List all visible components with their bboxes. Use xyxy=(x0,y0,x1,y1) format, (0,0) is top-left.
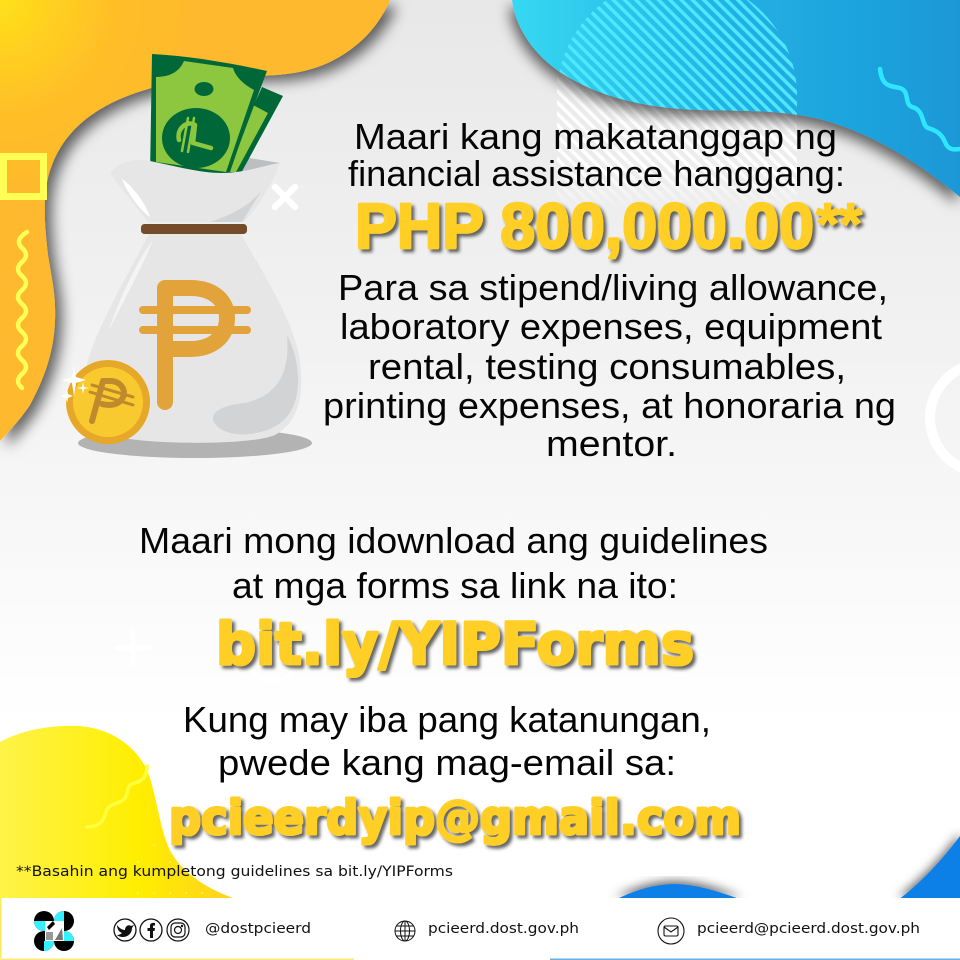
icon: mail xyxy=(658,918,684,944)
decorative faint circle xyxy=(249,633,297,681)
banknote peso sign xyxy=(179,123,211,148)
decorative yellow square xyxy=(4,153,46,200)
download text xyxy=(139,520,768,606)
description text: rental, testing consumables, xyxy=(368,346,846,387)
bag highlight xyxy=(108,240,153,332)
email: pcieerdyip@gmail.com xyxy=(169,791,741,846)
download text: Maari mong idownload ang guidelines xyxy=(139,520,768,561)
bag body xyxy=(83,232,301,443)
back banknote xyxy=(222,87,283,175)
shape: cyan top-right blob xyxy=(512,0,960,197)
email contact: pcieerd@pcieerd.dost.gov.ph xyxy=(697,921,920,937)
shape: blue bottom hump xyxy=(615,884,742,900)
icon: facebook xyxy=(140,919,162,941)
icon: twitter xyxy=(114,919,136,941)
yellow wavy line xyxy=(18,232,27,388)
description text: Para sa stipend/living allowance, xyxy=(338,267,888,308)
website: pcieerd.dost.gov.ph xyxy=(428,921,579,937)
bag inner back xyxy=(200,150,280,185)
coin xyxy=(61,360,150,444)
social handle: @dostpcieerd xyxy=(205,921,311,937)
decorative white cross xyxy=(275,187,295,207)
question text: Kung may iba pang katanungan, xyxy=(183,699,711,740)
bag neck flare xyxy=(110,160,280,222)
faint white wavy line xyxy=(147,736,188,766)
footer bar xyxy=(0,898,960,960)
amount: ** xyxy=(816,192,862,257)
logo xyxy=(34,911,74,951)
shadow under bag xyxy=(78,428,312,458)
flare highlight xyxy=(122,179,150,217)
shape: orange top-left blob xyxy=(0,0,390,441)
yellow wavy line on blob xyxy=(87,766,147,827)
illustration: money bag xyxy=(61,54,312,458)
decorative white ring xyxy=(930,363,960,473)
cyan wavy line xyxy=(880,69,960,149)
footnote: **Basahin ang kumpletong guidelines sa bit.ly/YIPForms xyxy=(16,864,453,880)
description text: printing expenses, at honoraria ng xyxy=(323,385,896,426)
dots on yellow blob xyxy=(137,844,203,894)
question text xyxy=(183,699,711,783)
icon: instagram xyxy=(167,919,189,941)
front banknote xyxy=(150,54,267,175)
description text xyxy=(323,267,896,464)
link: bit.ly/YIPForms xyxy=(216,610,694,678)
heading text xyxy=(348,116,845,194)
big peso sign xyxy=(143,288,247,402)
decorative faint plus xyxy=(117,632,149,664)
flare shading xyxy=(210,190,262,222)
sparkles xyxy=(61,366,89,403)
description text: laboratory expenses, equipment xyxy=(340,306,882,347)
stripes on blue blob xyxy=(560,0,797,115)
shape: yellow bottom-left blob xyxy=(0,726,233,898)
shape: blue bottom-right corner xyxy=(898,836,960,900)
icon: globe xyxy=(395,921,415,941)
bag tie xyxy=(141,224,247,234)
heading text: Maari kang makatanggap ng xyxy=(354,116,837,157)
heading text: financial assistance hanggang: xyxy=(348,153,845,194)
download text: at mga forms sa link na ito: xyxy=(232,565,678,606)
bag shading xyxy=(213,335,298,434)
description text: mentor. xyxy=(546,423,677,464)
decorative white stripes below blue shape xyxy=(557,70,797,190)
question text: pwede kang mag-email sa: xyxy=(218,742,676,783)
amount: PHP 800,000.00 xyxy=(355,190,814,262)
